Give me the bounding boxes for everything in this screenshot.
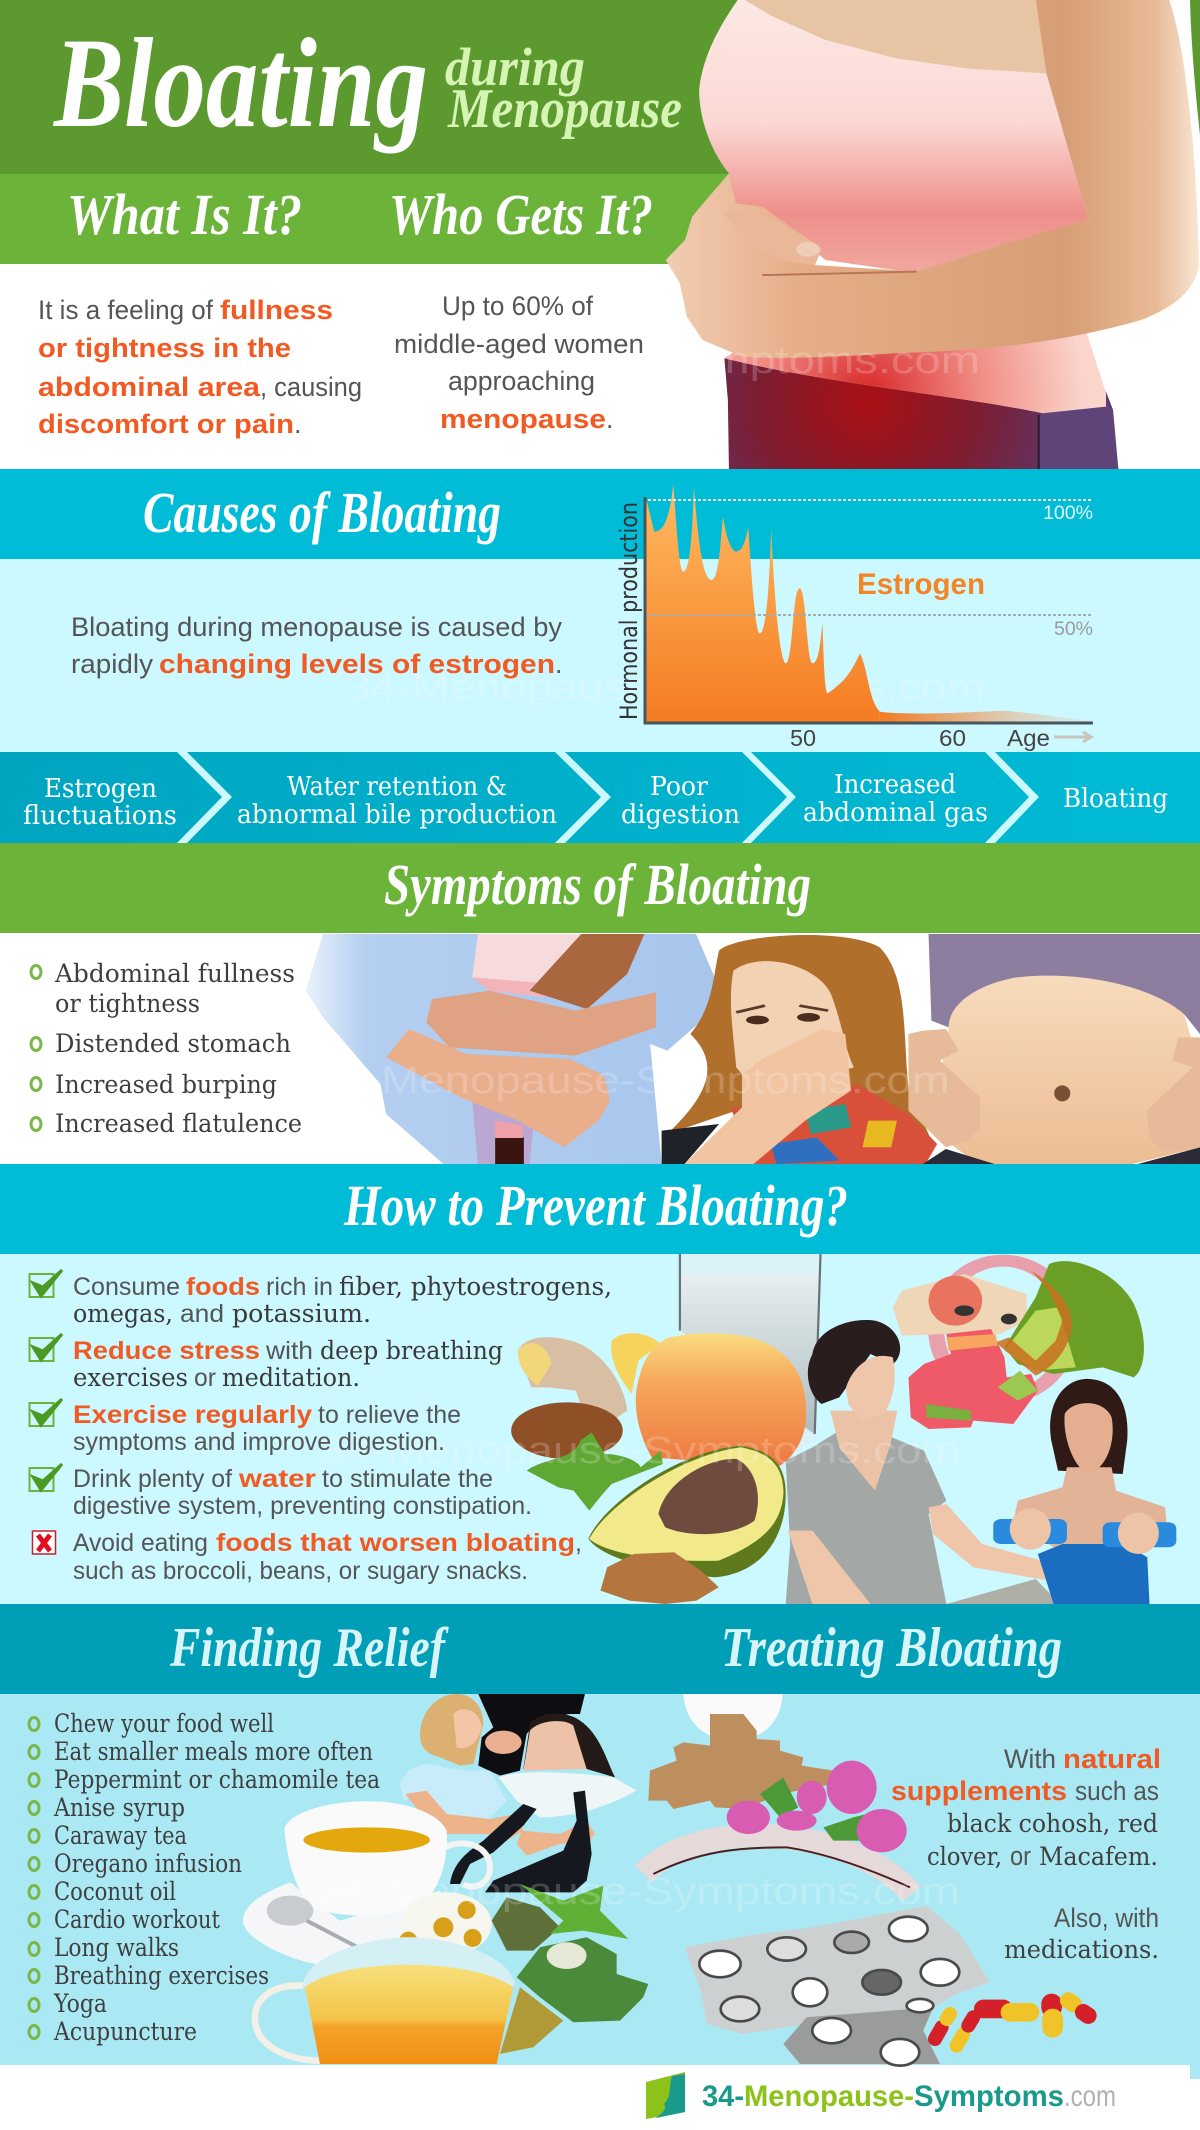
text block: what is it: abdominal area [38, 372, 261, 402]
watermark: 34-Menopause-Symptoms.com [320, 1430, 960, 1472]
photo: bloated belly [908, 934, 1200, 1164]
photo: glass tea cup [255, 1937, 515, 2064]
step: increased abdominal gas [803, 770, 988, 828]
chart area [647, 483, 1093, 723]
step: bloating: Bloating [1063, 784, 1168, 814]
photos: treatments [643, 1694, 1088, 2066]
text block: consume foods: Consume [73, 1273, 180, 1301]
photo: woman covering mouth [662, 935, 937, 1164]
text block: exercise regularly: Exercise regularly [73, 1401, 312, 1429]
text block: causes explanation: Bloating during menopause is caused by [71, 612, 562, 642]
text block: natural supplements: With [1004, 1744, 1056, 1774]
list: symptoms [31, 966, 41, 1130]
axis tick: 50: 50 [790, 725, 816, 751]
decorative green sliver at top right [1190, 0, 1200, 135]
text block: relief list: Eat smaller meals more often [54, 1737, 373, 1766]
photos: bloating symptoms [306, 934, 1200, 1164]
photo: ginger [518, 1333, 660, 1424]
step: estrogen fluctuations [23, 774, 177, 831]
text block: consume foods: and [180, 1300, 224, 1328]
step: estrogen fluctuations: Estrogen [44, 774, 157, 804]
heading: Symptoms of Bloating: Symptoms of Bloating [384, 852, 811, 917]
text block: what is it: discomfort or pain [38, 409, 294, 439]
chart: estrogen production by age [615, 483, 1093, 751]
footer site name [702, 2080, 1116, 2113]
text block: reduce stress: meditation. [222, 1363, 360, 1392]
text block: what is it: , causing [260, 372, 362, 402]
heading: Finding Relief: Finding Relief [169, 1617, 449, 1679]
text block: drink water: Drink plenty of [73, 1465, 232, 1493]
subtitle: during: during [445, 37, 585, 97]
photo: exercise machine [450, 1791, 592, 1892]
text block: reduce stress: or [194, 1364, 216, 1392]
photo: acupuncture [400, 1694, 637, 1856]
footer site name: .com [1064, 2080, 1116, 2113]
text block: causes explanation: . [555, 649, 563, 679]
text block: consume foods: rich in [266, 1273, 333, 1301]
step: poor digestion [621, 772, 740, 830]
text block: relief list: Yoga [53, 1989, 107, 2018]
icon: check water [30, 1464, 62, 1491]
bullet: burping [31, 1078, 41, 1090]
text block: natural supplements: or [1010, 1841, 1031, 1871]
text block: reduce stress: Reduce stress [73, 1337, 260, 1365]
icon: check stress [30, 1334, 62, 1361]
text block: drink water: digestive system, preventing constipation. [73, 1492, 532, 1520]
heading: Treating Bloating: Treating Bloating [721, 1617, 1062, 1679]
icon: site logo [646, 2072, 685, 2119]
text block: consume foods: potassium. [232, 1299, 371, 1328]
photo: woman holding abdomen [666, 0, 1199, 469]
list: relief bullets [29, 1718, 39, 2038]
text block: who gets it: menopause [440, 404, 606, 434]
text block: symptoms list: Increased burping [55, 1070, 277, 1099]
step: water retention: abnormal bile production [237, 800, 557, 830]
text block: natural supplements: such as [1075, 1776, 1159, 1806]
photo: clover flowers [727, 1761, 907, 1852]
text block: relief list: Peppermint or chamomile tea [54, 1765, 380, 1794]
text block: relief list: Breathing exercises [54, 1961, 269, 1990]
step: estrogen fluctuations: fluctuations [23, 801, 177, 831]
photo: glass of water [680, 1254, 821, 1454]
text block: relief list: Oregano infusion [54, 1849, 242, 1878]
watermark: 34-Menopause-Symptoms.com [320, 1871, 960, 1913]
bullet: flatulence [31, 1118, 41, 1130]
photo: avocado [588, 1446, 786, 1577]
photo: woman meditating [786, 1320, 1114, 1604]
text block: relief list: Chew your food well [54, 1709, 274, 1738]
panel: footer [646, 2065, 1200, 2119]
text block: exercise regularly: to relieve the [318, 1401, 461, 1429]
text block: avoid foods [73, 1529, 582, 1585]
step: water retention: Water retention & [287, 772, 507, 802]
photo: herbs [492, 1884, 648, 2054]
photo: tablets [648, 1714, 833, 1809]
panel: what and who headings [0, 174, 760, 264]
text block: relief list: Anise syrup [53, 1793, 185, 1822]
text block: medications: medications. [1004, 1935, 1159, 1964]
text block: who gets it: . [606, 404, 614, 434]
photos: prevention foods and exercise [511, 1254, 1176, 1604]
axis label: hormonal production: Hormonal production [615, 502, 643, 720]
text block: what is it: or tightness in the [38, 333, 291, 363]
label: 100%: 100% [1043, 503, 1093, 524]
icon: check exercise [30, 1399, 62, 1426]
panel: causes body [0, 559, 1200, 752]
icon: cross [32, 1531, 56, 1554]
axis tick: 60: 60 [939, 725, 966, 751]
text block: relief list: Caraway tea [54, 1821, 187, 1850]
text block: causes explanation: rapidly [71, 649, 154, 679]
label: 50%: 50% [1054, 619, 1093, 640]
photo: woman with dumbbells [993, 1379, 1176, 1604]
photo: flaxseed [511, 1402, 623, 1459]
photo: basil [527, 1432, 663, 1511]
icon: check fiber [30, 1270, 62, 1297]
text block: symptoms list: or tightness [55, 989, 200, 1018]
text block: drink water: to stimulate the [322, 1465, 493, 1493]
photo: prohibited foods [893, 1261, 1144, 1429]
text block: symptoms list: Distended stomach [55, 1029, 291, 1058]
photos: relief remedies [243, 1694, 648, 2064]
text block: avoid foods: such as broccoli, beans, or sugary snacks. [73, 1557, 528, 1585]
text block: causes explanation: changing levels of estrogen [159, 649, 555, 679]
photo: almonds [600, 1552, 719, 1604]
photo: woman in blue shirt [306, 934, 725, 1164]
text block: exercise regularly: symptoms and improve digestion. [73, 1428, 445, 1456]
bullet: fullness [31, 966, 41, 978]
text block: relief list [53, 1709, 380, 2046]
text block: who gets it [394, 291, 644, 434]
footer site name: Symptoms [914, 2080, 1064, 2113]
photo: supplement bottle [683, 1694, 783, 1736]
heading: How to Prevent Bloating: How to Prevent Bloating? [343, 1173, 848, 1238]
text block: relief list: Long walks [54, 1933, 179, 1962]
text block: who gets it: Up to 60% of [442, 291, 593, 321]
text block: drink water: water [238, 1465, 316, 1493]
panel: header banner [0, 0, 760, 174]
axis label: Age: Age [1007, 725, 1050, 751]
text block: natural supplements: natural [1063, 1744, 1161, 1774]
title: Bloating: Bloating [52, 12, 428, 154]
panel: relief and treatment body [0, 1694, 1200, 2065]
text block: reduce stress: deep breathing [320, 1336, 503, 1365]
text block: symptoms list: Abdominal fullness [54, 959, 295, 988]
text block: what is it: It is a feeling of [38, 295, 213, 325]
photo: capsules [935, 2001, 1088, 2046]
watermark: 34-Menopause-Symptoms.com [325, 340, 980, 382]
text block: relief list: Coconut oil [54, 1877, 176, 1906]
footer site name: Menopause- [744, 2080, 914, 2113]
text block: drink water [73, 1465, 532, 1520]
text block: natural supplements: black cohosh, red [947, 1809, 1158, 1838]
text block: who gets it: approaching [448, 366, 595, 396]
step: water retention [237, 772, 557, 830]
text block: reduce stress [73, 1336, 503, 1392]
text block: consume foods: omegas, [73, 1299, 173, 1328]
heading: Who Gets It: Who Gets It? [389, 182, 653, 247]
photo: white tea cup [243, 1801, 490, 1966]
text block: causes explanation [71, 612, 563, 679]
panel: relief and treatment heading bar [0, 1604, 1200, 1694]
text block: natural supplements: clover, [927, 1842, 1002, 1871]
panel: prevention body [0, 1254, 1200, 1604]
step: poor digestion: digestion [621, 800, 740, 830]
step: increased abdominal gas: abdominal gas [803, 798, 988, 828]
footer site name: 34- [702, 2080, 744, 2113]
photo: apple [636, 1333, 806, 1467]
panel: prevention heading bar [0, 1164, 1200, 1254]
step: poor digestion: Poor [650, 772, 709, 802]
text block: relief list: Acupuncture [53, 2017, 197, 2046]
text block: natural supplements: supplements [891, 1776, 1067, 1806]
watermark: 34-Menopause-Symptoms.com [345, 667, 985, 709]
text block: who gets it: middle-aged women [394, 329, 644, 359]
bullet: distended [31, 1038, 41, 1050]
text block: avoid foods: Avoid eating [73, 1529, 208, 1557]
text block: medications [1004, 1903, 1159, 1964]
step: increased abdominal gas: Increased [834, 770, 956, 800]
subtitle: Menopause: Menopause [447, 78, 682, 140]
panel: causes heading bar [0, 469, 1200, 559]
text block: consume foods: foods [186, 1273, 260, 1301]
text block: avoid foods: foods that worsen bloating [216, 1529, 575, 1557]
text block: natural supplements [891, 1744, 1161, 1871]
text block: symptoms list [54, 959, 302, 1138]
text block: exercise regularly [73, 1401, 461, 1456]
text block: relief list: Cardio workout [54, 1905, 220, 1934]
heading: What Is It: What Is It? [67, 182, 302, 247]
text block: natural supplements: Macafem. [1039, 1842, 1158, 1871]
arrow: age direction [1054, 732, 1091, 742]
text block: reduce stress: with [265, 1337, 313, 1365]
text block: what is it [38, 295, 362, 439]
photo: blister packs [685, 1906, 990, 2066]
panel: symptoms heading bar [0, 843, 1200, 933]
text block: reduce stress: exercises [73, 1363, 188, 1392]
label: Estrogen: Estrogen [857, 568, 985, 601]
panel: cause chain chevrons [0, 752, 1200, 843]
photo: chamomile [399, 1892, 492, 1956]
photo: black cohosh [643, 1835, 912, 1894]
text block: symptoms list: Increased flatulence [55, 1109, 302, 1138]
heading: Causes of Bloating: Causes of Bloating [143, 480, 501, 545]
text block: avoid foods: , [575, 1529, 582, 1557]
watermark: 34-Menopause-Symptoms.com [315, 1060, 950, 1102]
text block: consume foods [73, 1272, 612, 1328]
text block: consume foods: fiber, phytoestrogens, [339, 1272, 612, 1301]
text block: what is it: fullness [220, 295, 333, 325]
text block: what is it: . [294, 409, 302, 439]
text block: medications: Also, with [1054, 1903, 1159, 1933]
